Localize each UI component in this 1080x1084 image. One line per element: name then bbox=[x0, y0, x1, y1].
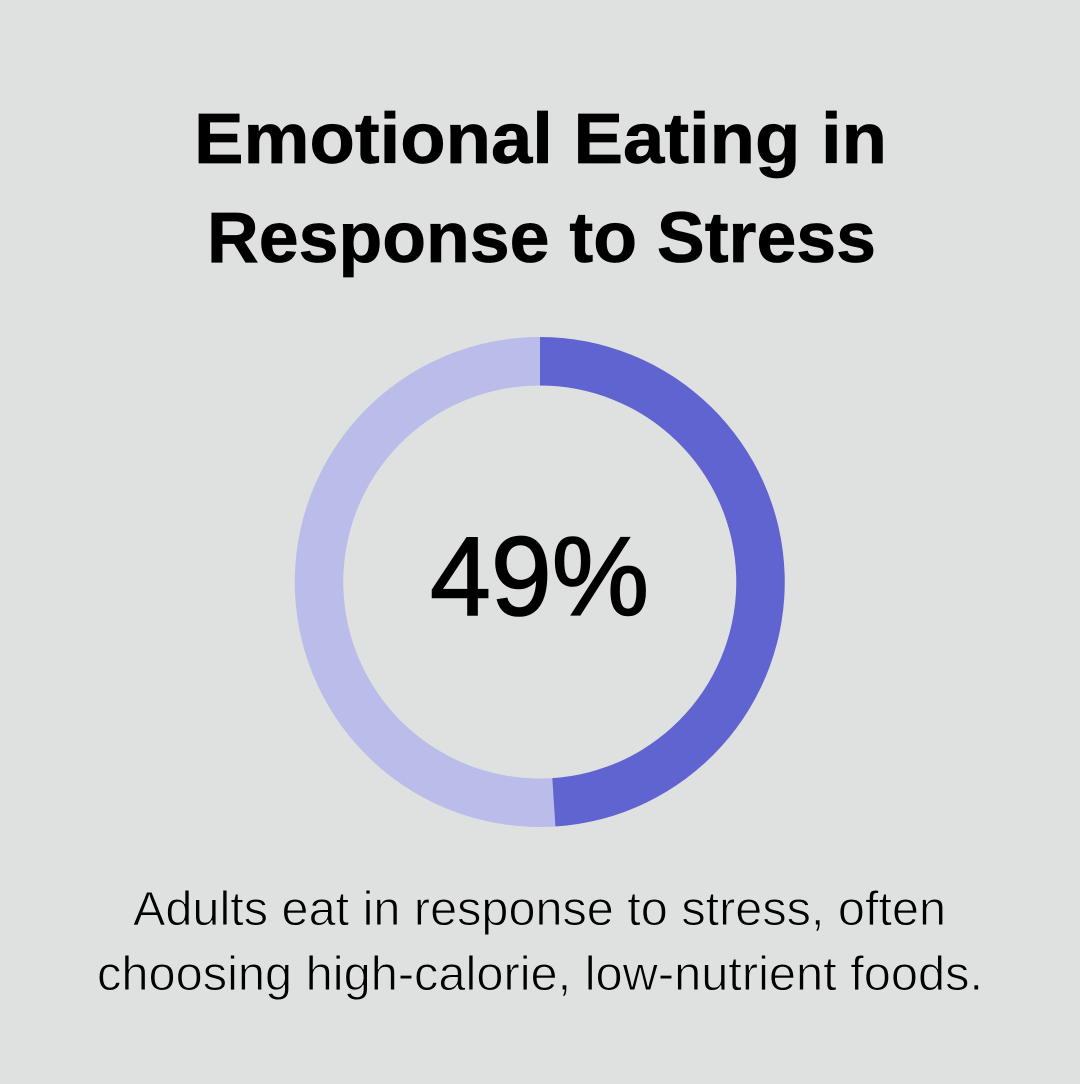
donut chart: 49% bbox=[295, 337, 785, 827]
caption: Adults eat in response to stress, often bbox=[133, 883, 946, 936]
caption bbox=[97, 883, 983, 1001]
donut segment: 49% bbox=[540, 337, 785, 826]
title: Emotional Eating in bbox=[194, 100, 887, 179]
center value: 49% bbox=[430, 514, 649, 639]
donut track: remaining 51% bbox=[295, 337, 555, 827]
caption: choosing high-calorie, low-nutrient foods. bbox=[97, 948, 983, 1001]
title: Response to Stress bbox=[207, 199, 876, 278]
title bbox=[194, 100, 887, 278]
